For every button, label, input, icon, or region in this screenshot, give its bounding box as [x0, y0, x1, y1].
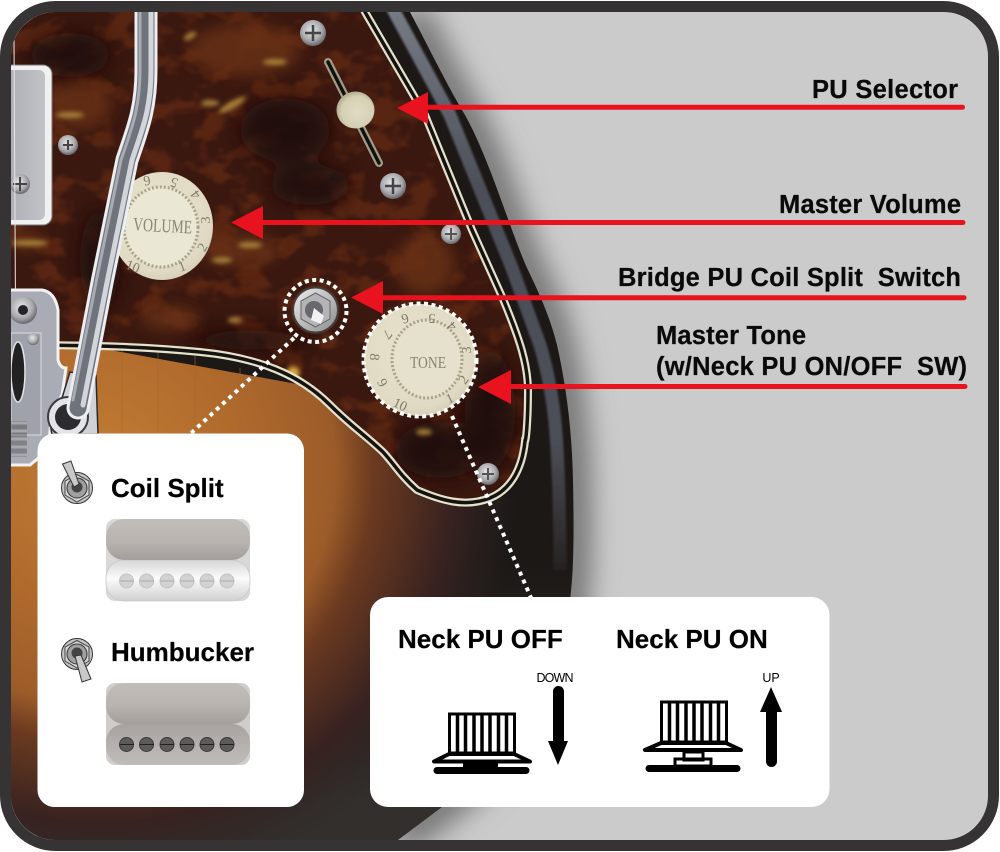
volume scale numbers: 3 [199, 216, 214, 224]
sunburst wood finish [11, 349, 492, 840]
saddle slot [11, 342, 25, 402]
panel: coil split / humbucker [38, 434, 304, 807]
tone scale numbers [370, 314, 471, 410]
tortoise warm patches [7, 24, 455, 330]
tone scale numbers: 7 [379, 326, 395, 341]
label: Master Tone: Master Tone [656, 322, 806, 350]
pickup screw [10, 174, 30, 194]
tone scale numbers: 1 [444, 391, 457, 408]
bridge plate [0, 290, 98, 465]
label: UP: UP [762, 671, 780, 685]
tone scale numbers: 10 [390, 396, 409, 415]
pole pieces [120, 574, 234, 588]
label: PU Selector: PU Selector [812, 76, 958, 104]
heading: Humbucker: Humbucker [111, 637, 254, 667]
bridge top post [9, 296, 37, 324]
icon: knob pushed down [434, 714, 530, 770]
tortoise dark patches [30, 33, 515, 478]
wood grain [122, 350, 240, 433]
label: Master Tone: (w/Neck PU ON/OFF SW) [656, 353, 967, 381]
knob label: TONE: TONE [410, 353, 446, 372]
coil split toggle switch [292, 286, 340, 334]
tone scale numbers: 4 [444, 318, 460, 333]
tone scale numbers: 2 [456, 373, 473, 387]
tortoise bright spot [286, 366, 300, 380]
top selector screw [300, 20, 326, 46]
selector tip [336, 92, 374, 128]
neck pickup cover [11, 64, 52, 226]
arrow: up [760, 687, 782, 767]
dotted leader to coil panel [188, 338, 294, 436]
tone scale numbers: 9 [373, 376, 390, 390]
pickguard screw left [58, 135, 78, 155]
icon: knob pulled up [645, 702, 741, 768]
dotted callout ring: tone [364, 304, 476, 416]
tremolo arm [73, 0, 151, 408]
tone scale numbers: 6 [400, 309, 410, 326]
heading: Neck PU ON: Neck PU ON [616, 624, 768, 654]
saddle springs [11, 423, 27, 455]
body binding highlight [388, 0, 560, 570]
arrow: Master Volume [231, 206, 966, 239]
pickguard binding [60, 12, 532, 507]
tone knob [364, 304, 476, 416]
label: Bridge PU Coil Split Switch: Bridge PU Coil Split Switch [618, 264, 961, 292]
lower selector screw [380, 173, 406, 199]
pickguard screw bottom [477, 463, 499, 485]
label: Master Volume: Master Volume [779, 191, 961, 219]
volume scale numbers: 6 [142, 172, 151, 188]
tone scale numbers: 8 [366, 353, 381, 361]
arrow: PU Selector [397, 92, 965, 124]
body shadow [398, 12, 574, 840]
heading: Coil Split: Coil Split [111, 473, 224, 503]
volume scale numbers [126, 176, 210, 272]
tremolo mount [50, 372, 98, 434]
panel: neck pickup on/off [370, 597, 830, 807]
icon: toggle up [62, 461, 92, 504]
label: Master Tone [656, 322, 967, 381]
dotted callout ring: switch [284, 280, 346, 342]
volume scale numbers: 1 [177, 259, 188, 276]
grey studio backdrop [398, 12, 988, 840]
pole pieces [120, 738, 234, 752]
label: DOWN: DOWN [536, 671, 574, 685]
pickup: humbucker state [106, 683, 250, 765]
volume knob [111, 172, 214, 280]
tortoise pale flecks [12, 30, 432, 435]
icon: toggle down [62, 638, 92, 682]
string [14, 40, 16, 288]
heading: Neck PU OFF: Neck PU OFF [398, 624, 563, 654]
arrow: Bridge PU Coil Split Switch [351, 281, 966, 314]
tortoise pickguard [11, 12, 524, 498]
arrow: down [548, 686, 568, 765]
selector slot [328, 62, 379, 163]
volume scale numbers: 10 [123, 258, 142, 277]
arrow: Master Tone [478, 370, 968, 404]
volume scale numbers: 5 [169, 173, 180, 190]
knob label: VOLUME: VOLUME [133, 214, 193, 239]
pickup: coil split state [106, 519, 250, 601]
volume scale numbers: 2 [195, 241, 212, 255]
tone scale numbers: 3 [460, 346, 475, 354]
tone scale numbers: 5 [428, 310, 436, 325]
guitar body silhouette [0, 0, 574, 852]
pickguard screw right [441, 224, 461, 244]
bridge saddle [11, 333, 41, 435]
dotted leader to neck panel [452, 416, 532, 600]
volume scale numbers: 4 [188, 187, 204, 201]
